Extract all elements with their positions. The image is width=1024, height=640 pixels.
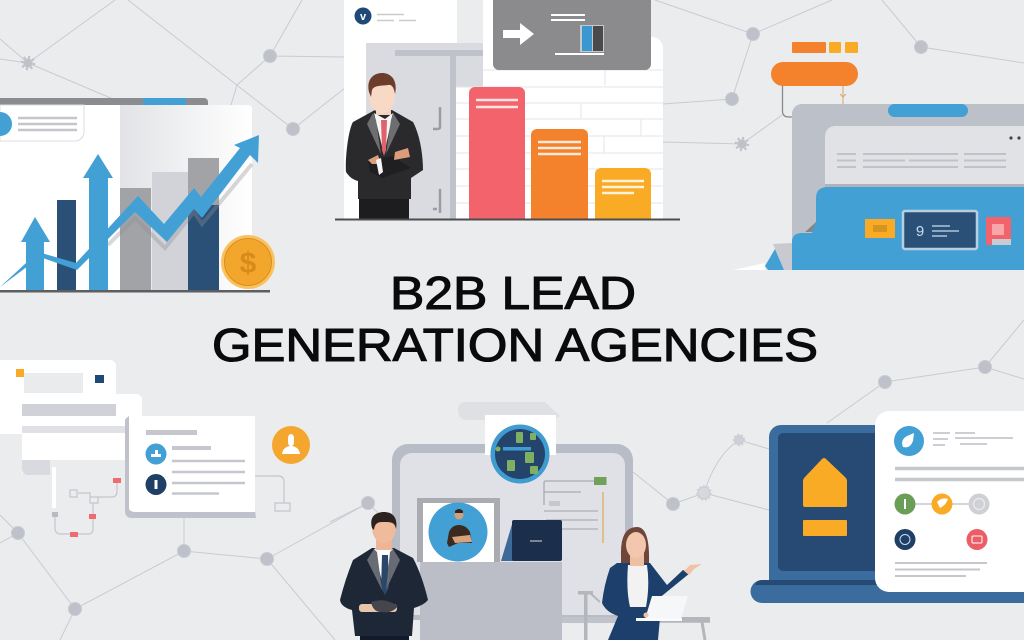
yellow bar (595, 168, 651, 219)
side table (578, 591, 710, 640)
panel: laptop with checklist card (750, 411, 1024, 603)
white card (875, 411, 1024, 592)
red bar (469, 87, 525, 219)
panel: overlapping forms (0, 360, 310, 537)
desk stripe (562, 617, 710, 623)
brick wall (456, 0, 663, 219)
white post (52, 467, 56, 508)
network badge (485, 415, 556, 484)
title (212, 267, 818, 371)
laptop lid (769, 425, 900, 582)
tablet body (792, 104, 1024, 270)
logo badge: v (360, 11, 367, 23)
video frame (417, 498, 500, 562)
gray card with arrow (493, 0, 651, 70)
blue cover (792, 187, 1024, 270)
middle form (22, 394, 142, 475)
title: B2B LEAD (390, 267, 636, 319)
shelf (458, 402, 560, 420)
laptop base (750, 580, 1024, 603)
icon: coin (221, 235, 275, 289)
floor line (335, 218, 680, 220)
woman with laptop (602, 527, 702, 640)
connectors (782, 86, 846, 117)
man with phone (340, 512, 428, 640)
browser top bar (0, 98, 208, 105)
growth arrow (0, 135, 259, 287)
monitor frame (392, 444, 633, 640)
back white form (0, 360, 116, 434)
blue wedge (733, 243, 792, 270)
title: GENERATION AGENCIES (212, 319, 818, 371)
screen (825, 126, 1024, 187)
laptop (501, 520, 562, 561)
blue cover: 9 (916, 223, 924, 240)
orange pill (771, 62, 858, 86)
red tags (70, 478, 121, 537)
panel: orange flow and tablet (733, 42, 1024, 270)
panel: central monitor with two people (340, 402, 710, 640)
bars and arrows (21, 154, 219, 290)
chart window (0, 105, 252, 291)
baseline (0, 290, 270, 292)
logo badge (354, 8, 416, 24)
small orange tags (792, 42, 858, 53)
orange bar (531, 129, 588, 219)
profile card (125, 416, 256, 518)
info card (0, 105, 84, 141)
flow connectors (55, 476, 290, 534)
panel: growth chart (0, 98, 275, 292)
white wall (344, 0, 457, 219)
door (366, 43, 483, 219)
man in black suit (346, 73, 423, 219)
flow diagram (544, 477, 606, 543)
icon: user badge (272, 426, 310, 464)
icon: coin: $ (240, 247, 257, 280)
counter (420, 562, 562, 640)
panel: business man with descending bars (335, 0, 680, 220)
icon: orange house (803, 458, 847, 536)
